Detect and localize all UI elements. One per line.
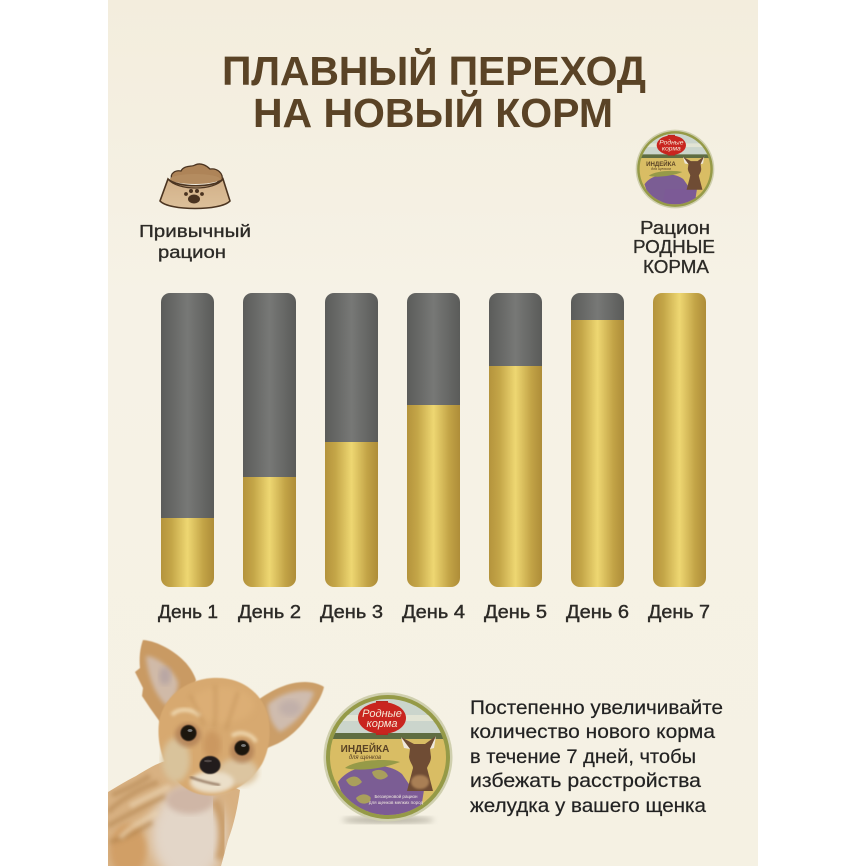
text block: instructions: в течение 7 дней, чтобы — [470, 746, 696, 768]
bar: day 6 — [571, 293, 624, 587]
text block: instructions: Постепенно увеличивайте — [470, 697, 723, 719]
label: habitual diet: Привычный — [139, 221, 251, 241]
bar: day 4 — [407, 293, 460, 587]
nose — [200, 756, 220, 774]
label: habitual diet — [139, 221, 251, 262]
background panel — [108, 0, 758, 866]
label: new diet — [633, 218, 715, 277]
bar: day 3 — [325, 293, 378, 587]
icon: large can: Беззерновой рацион — [374, 793, 418, 799]
icon: small can: ИНДЕЙКА — [646, 160, 676, 168]
bar chart: seven day transition — [161, 293, 706, 587]
can flavour text: ИНДЕЙКА — [341, 742, 389, 755]
right ear — [258, 682, 324, 752]
title: НА НОВЫЙ КОРМ — [253, 90, 613, 136]
icon: large can — [324, 692, 452, 824]
can brand banner — [376, 701, 388, 735]
text block: instructions: количество нового корма — [470, 721, 715, 743]
icon: large can: для щенков — [349, 755, 381, 761]
day labels: День 4 — [402, 602, 465, 622]
day labels: День 7 — [648, 602, 710, 622]
icon: large can: для щенков мелких пород — [369, 800, 424, 805]
day labels: День 3 — [320, 602, 383, 622]
bar: day 1 — [161, 293, 214, 587]
head — [158, 678, 270, 796]
face markings — [162, 738, 190, 782]
text block: instructions: желудка у вашего щенка — [470, 795, 706, 817]
icon: small can: для щенков — [651, 167, 671, 171]
day labels — [158, 602, 710, 622]
bar: day 5 — [489, 293, 542, 587]
day labels: День 1 — [158, 602, 218, 622]
day labels: День 2 — [238, 602, 301, 622]
label: new diet: РОДНЫЕ — [633, 237, 715, 257]
text block: instructions — [470, 697, 723, 817]
day labels: День 6 — [566, 602, 629, 622]
icon: large can: корма — [367, 718, 397, 730]
can dog — [401, 736, 436, 791]
title: ПЛАВНЫЙ ПЕРЕХОД — [222, 48, 646, 94]
can leaf pattern — [338, 766, 424, 815]
label: new diet: КОРМА — [643, 257, 709, 277]
illustration: chihuahua puppy — [108, 640, 324, 866]
left ear — [135, 640, 196, 722]
body — [108, 755, 243, 866]
bar: day 2 — [243, 293, 296, 587]
icon: small can: Родные — [659, 139, 684, 147]
icon: food bowl — [160, 164, 230, 208]
icon: paw print — [184, 189, 204, 204]
bar: day 7 — [653, 293, 706, 587]
icon: small can — [636, 130, 714, 208]
can sky and field — [334, 699, 442, 735]
icon: large can: Родные — [362, 708, 402, 720]
text block: instructions: избежать расстройства — [470, 770, 701, 792]
label: habitual diet: рацион — [158, 242, 226, 262]
day labels: День 5 — [484, 602, 547, 622]
eyes — [180, 725, 196, 741]
label: new diet: Рацион — [640, 218, 710, 238]
icon: small can: корма — [662, 146, 681, 153]
title — [222, 48, 646, 136]
